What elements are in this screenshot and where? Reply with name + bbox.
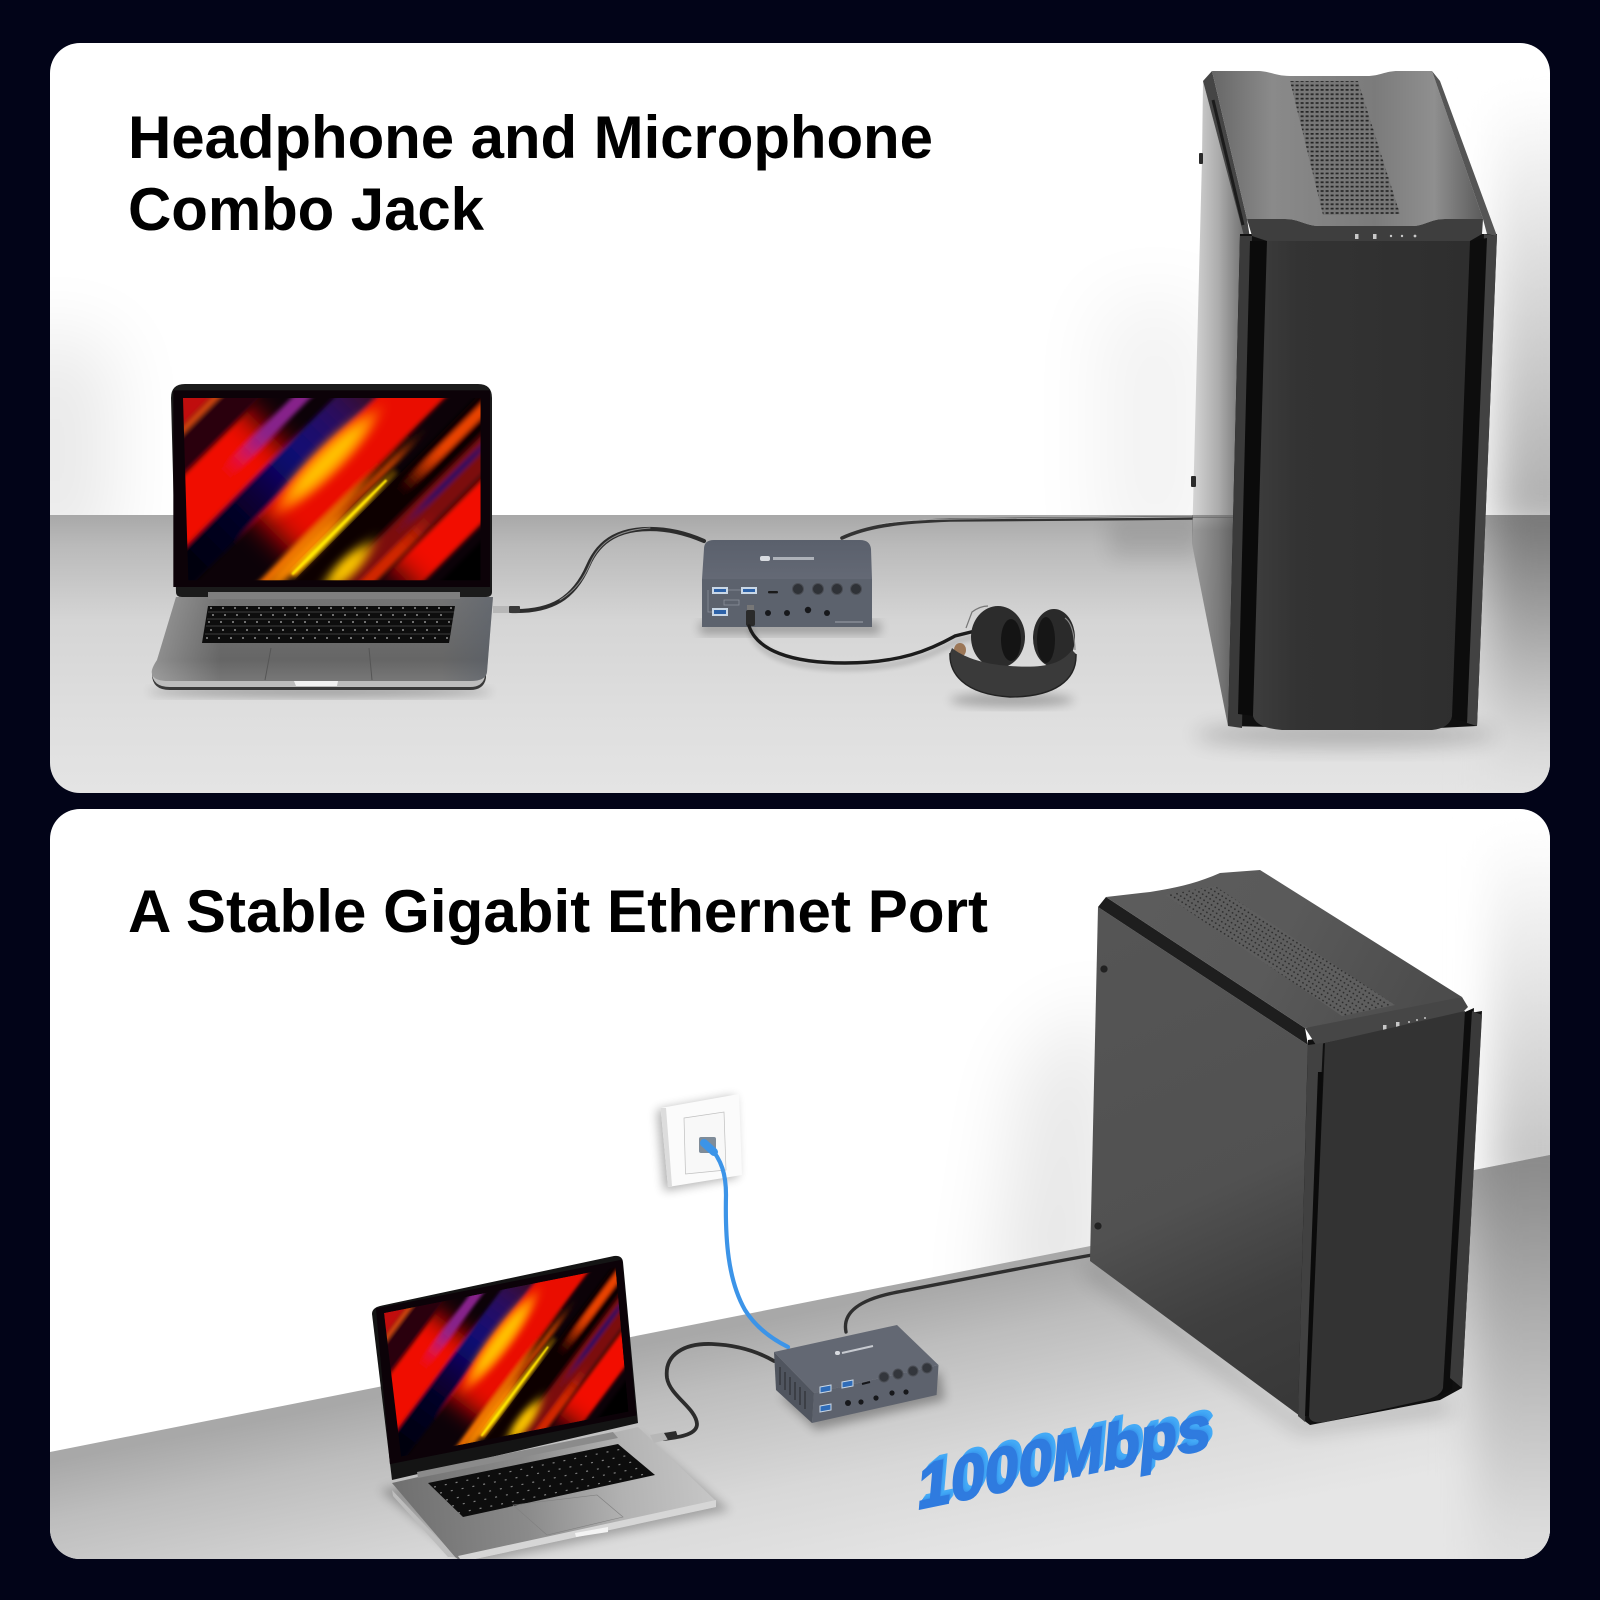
- cable: laptop to hub: [512, 528, 704, 611]
- audio plug: [746, 605, 755, 626]
- heading: Headphone and Microphone Combo Jack: [130, 114, 931, 230]
- PC frame strips: [1228, 236, 1252, 728]
- cable: hub to headphones: [749, 626, 977, 668]
- hub logo: [760, 556, 814, 561]
- audio jacks: [765, 607, 830, 616]
- laptop screen: [173, 390, 490, 587]
- knobs: [879, 1363, 932, 1382]
- laptop base: [392, 1427, 716, 1562]
- headphone ear cups: [1033, 609, 1075, 667]
- heading: Headphone and Microphone Combo Jack: Headphone and Microphone: [128, 104, 933, 171]
- PC front panel: [1309, 1011, 1465, 1422]
- PC side panel: [1192, 81, 1244, 726]
- PC front lip: [1247, 219, 1483, 241]
- PC front strip: [1298, 1043, 1323, 1422]
- PC right strip: [1450, 1011, 1482, 1388]
- cable: hub to PC: [845, 1255, 1092, 1332]
- hub device: [700, 540, 880, 634]
- laptop screen: [268, 1078, 763, 1600]
- heading: A Stable Gigabit Ethernet Port: A Stable Gigabit Ethernet Port: [128, 878, 988, 945]
- PC screws: [1191, 153, 1203, 487]
- hub logo: [835, 1346, 873, 1355]
- PC top: [1106, 870, 1462, 1028]
- laptop keyboard: [202, 606, 455, 643]
- USB-C connector: [493, 606, 520, 613]
- audio jacks: [845, 1389, 909, 1406]
- knobs: [792, 584, 862, 594]
- laptop lid: [372, 1256, 638, 1480]
- icon: laptop, front view: [151, 384, 520, 700]
- PC dark gap: [1438, 1008, 1474, 1396]
- cable: laptop to hub: [664, 1344, 774, 1439]
- laptop hinge: [208, 592, 460, 599]
- laptop base: [152, 597, 493, 690]
- PC front ports: [1355, 234, 1416, 239]
- PC top: [1212, 71, 1483, 226]
- PC front lip: [1305, 997, 1468, 1045]
- headphone band: [950, 648, 1076, 697]
- laptop lid: [171, 384, 492, 597]
- PC screws: [1094, 965, 1108, 1230]
- PC body backing: [1228, 234, 1497, 730]
- PC top vent: [1290, 81, 1400, 215]
- laptop keyboard: [428, 1444, 655, 1517]
- hub device, perspective view: [774, 1325, 945, 1430]
- panel: gigabit ethernet port: [50, 809, 1595, 1600]
- USB ports: [820, 1380, 870, 1412]
- cable: hub to PC: [842, 517, 1192, 538]
- cable: blue ethernet: [704, 1143, 788, 1347]
- PC tower, front view: [1191, 71, 1497, 730]
- PC body backing: [1298, 1011, 1482, 1425]
- USB-C connector: [650, 1431, 678, 1443]
- icon: laptop, angled view: [268, 1078, 763, 1600]
- laptop notch: [294, 681, 338, 686]
- ethernet plug: [699, 1137, 716, 1153]
- wall plate with ethernet port: [657, 1094, 742, 1191]
- PC front ports: [1383, 1017, 1426, 1030]
- hub side vents: [780, 1367, 805, 1409]
- laptop hinge: [417, 1432, 618, 1478]
- USB ports: [708, 587, 778, 616]
- 3D label: 1000Mbps: 1000Mbps: [913, 1393, 1214, 1523]
- icon: headphones: [950, 606, 1076, 707]
- laptop notch: [575, 1527, 608, 1537]
- PC dark gaps: [1238, 241, 1252, 714]
- heading: Headphone and Microphone Combo Jack: Combo Jack: [128, 176, 485, 243]
- PC tower, perspective view: [1090, 870, 1482, 1425]
- PC top vent: [1165, 886, 1395, 1016]
- panel: headphone and microphone combo jack: [0, 43, 1600, 820]
- laptop trackpad: [513, 1495, 623, 1535]
- PC front panel: [1253, 241, 1470, 730]
- PC side panel: [1090, 907, 1308, 1416]
